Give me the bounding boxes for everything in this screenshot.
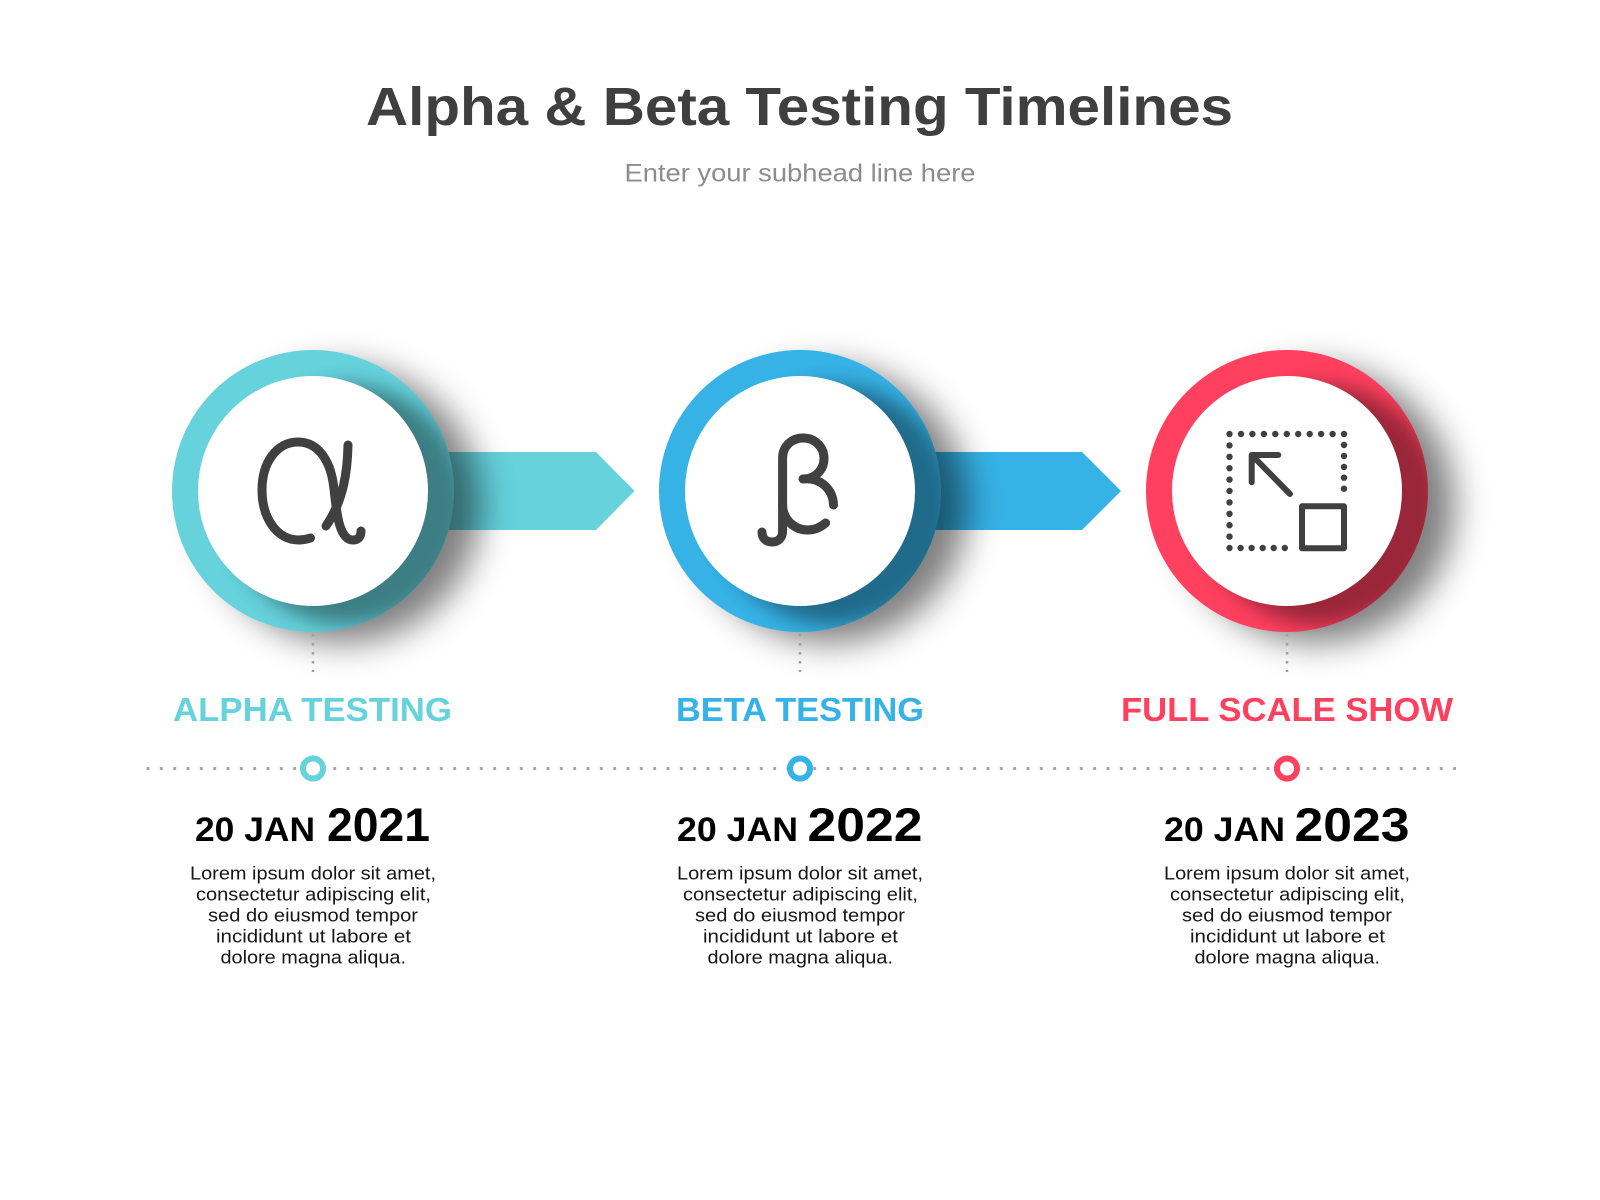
- ring inner shading: [1201, 385, 1441, 625]
- description: alpha: sed do eiusmod tempor: [208, 906, 418, 926]
- ring: [659, 350, 941, 632]
- icon: resize: [1226, 431, 1347, 551]
- connector dots: full scale: [1286, 634, 1288, 672]
- ring shadow: [205, 367, 481, 643]
- description: full scale: incididunt ut labore et: [1190, 926, 1385, 946]
- white disc: [198, 376, 428, 606]
- ring: [172, 350, 454, 632]
- description: full scale: dolore magna aliqua.: [1194, 948, 1380, 968]
- description: alpha: [190, 864, 436, 968]
- arrow: alpha to beta: [400, 452, 634, 530]
- description: beta: [677, 864, 923, 968]
- dotted frame: [1226, 431, 1347, 551]
- label: alpha testing: ALPHA TESTING: [173, 691, 452, 728]
- white disc: [685, 376, 915, 606]
- description: beta: consectetur adipiscing elit,: [683, 884, 918, 904]
- marker: 2022: [790, 758, 810, 778]
- step 1: alpha testing graphic: [172, 350, 634, 643]
- timeline: [146, 758, 1456, 778]
- date: 2022: [677, 798, 922, 851]
- description: alpha: incididunt ut labore et: [216, 926, 411, 946]
- description: alpha: dolore magna aliqua.: [220, 948, 406, 968]
- date: 2022: 2022: [808, 798, 922, 851]
- title: Alpha & Beta Testing Timelines: [366, 77, 1233, 137]
- description: alpha: consectetur adipiscing elit,: [196, 884, 431, 904]
- small square: [1302, 506, 1344, 548]
- icon: beta: [762, 438, 834, 542]
- label: beta testing: BETA TESTING: [676, 691, 924, 728]
- arrow up-left: [1252, 455, 1290, 494]
- description: alpha: Lorem ipsum dolor sit amet,: [190, 864, 436, 884]
- ring shadow: [1179, 367, 1455, 643]
- subtitle: Enter your subhead line here: [624, 160, 976, 188]
- description: full scale: consectetur adipiscing elit,: [1170, 884, 1405, 904]
- arrow: beta to full scale: [887, 452, 1121, 530]
- marker: 2023: [1277, 758, 1297, 778]
- ring inner shading: [227, 385, 467, 625]
- label: full scale show: FULL SCALE SHOW: [1121, 691, 1454, 728]
- description: full scale: [1164, 864, 1410, 968]
- date: 2023: 20 JAN: [1164, 811, 1285, 849]
- description: beta: sed do eiusmod tempor: [695, 906, 905, 926]
- step 2: beta testing graphic: [659, 350, 1121, 643]
- step 3: full scale show graphic: [1146, 350, 1455, 643]
- date: 2021: 2021: [327, 798, 430, 851]
- marker: 2021: [303, 758, 323, 778]
- date: 2023: 2023: [1294, 798, 1410, 851]
- description: beta: incididunt ut labore et: [703, 926, 898, 946]
- ring: [1146, 350, 1428, 632]
- ring inner shading: [714, 385, 954, 625]
- date: 2021: [195, 798, 430, 851]
- dotted line: [146, 767, 1456, 770]
- ring shadow: [692, 367, 968, 643]
- date: 2023: [1164, 798, 1410, 851]
- description: beta: Lorem ipsum dolor sit amet,: [677, 864, 923, 884]
- white disc: [1172, 376, 1402, 606]
- date: 2022: 20 JAN: [677, 811, 798, 849]
- icon: alpha: [262, 442, 361, 540]
- description: beta: dolore magna aliqua.: [708, 948, 893, 968]
- description: full scale: Lorem ipsum dolor sit amet,: [1164, 864, 1410, 884]
- connector dots: beta: [799, 634, 801, 672]
- connector dots: alpha: [312, 634, 314, 672]
- description: full scale: sed do eiusmod tempor: [1182, 906, 1392, 926]
- date: 2021: 20 JAN: [195, 811, 315, 849]
